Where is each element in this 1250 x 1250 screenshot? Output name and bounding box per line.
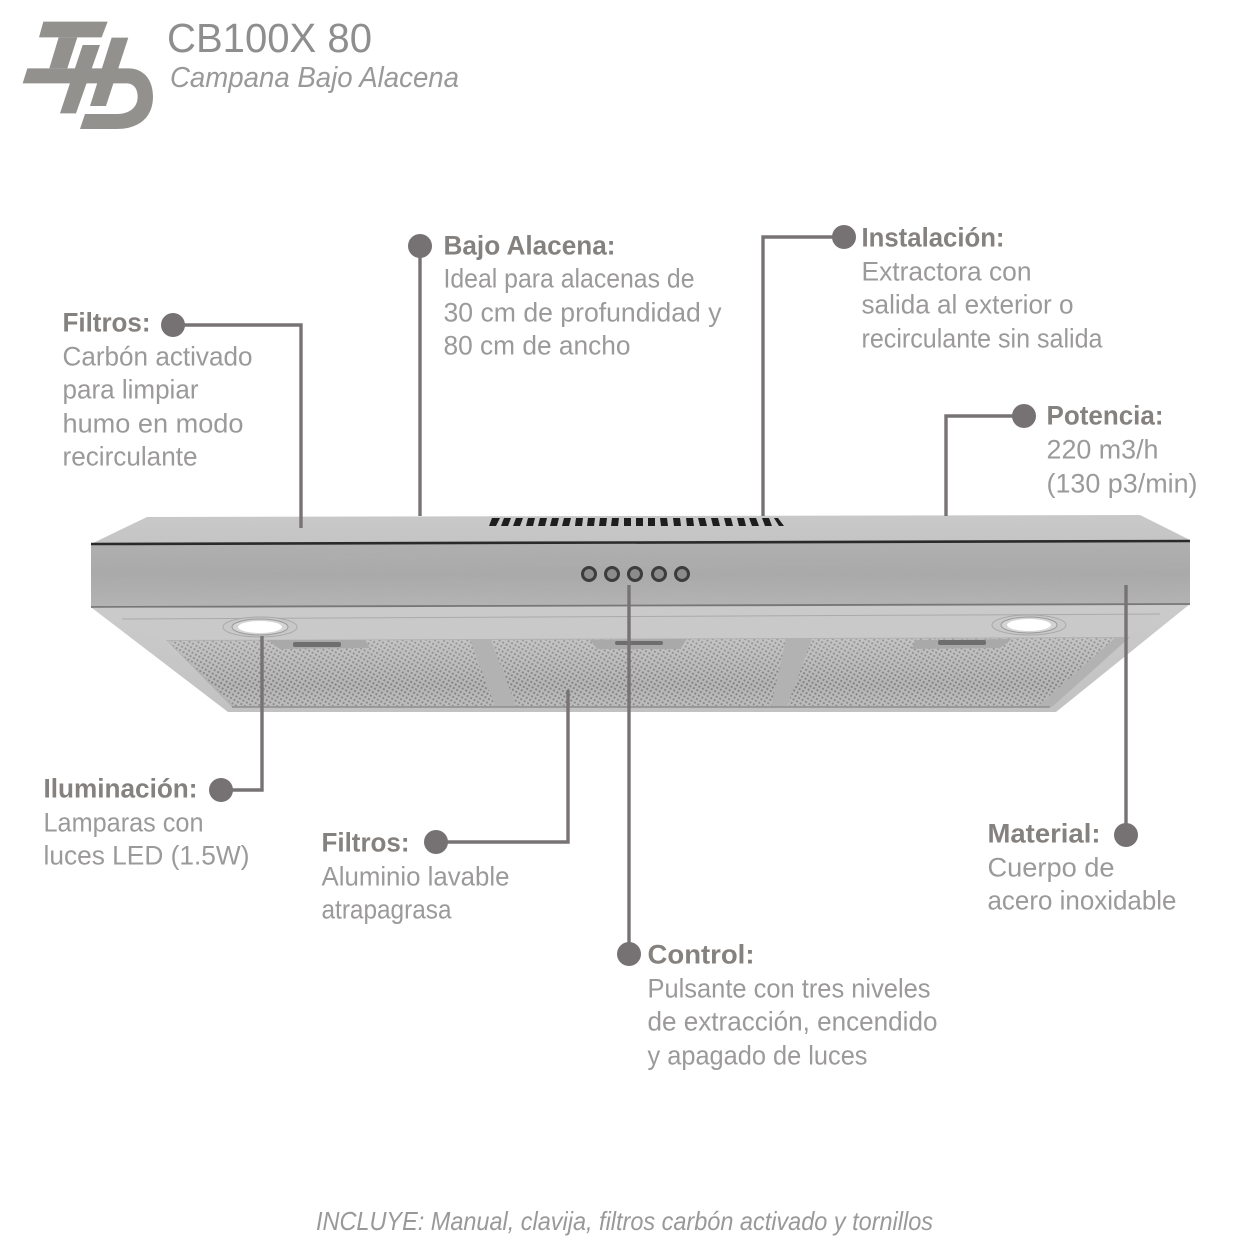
callout text: Carbón activado <box>62 341 252 371</box>
logo: THD monogram <box>23 22 153 129</box>
callout text: 30 cm de profundidad y <box>444 297 722 327</box>
callout text: Pulsante con tres niveles <box>648 973 930 1003</box>
callout text <box>1046 400 1198 498</box>
callout text: Iluminación: <box>44 773 198 803</box>
leader line <box>627 585 631 954</box>
hood front panel <box>91 541 1190 607</box>
callout text: Lamparas con <box>44 807 204 837</box>
callout text: Potencia: <box>1046 400 1164 430</box>
callout text: Control: <box>648 939 754 969</box>
callout text: Material: <box>988 818 1100 848</box>
callout text <box>62 307 252 471</box>
marker dot <box>1012 404 1036 428</box>
title: model name: CB100X 80 <box>167 15 372 61</box>
callout text: Cuerpo de <box>988 852 1114 882</box>
callout text: Ideal para alacenas de <box>444 263 694 293</box>
callout text: humo en modo <box>62 408 244 438</box>
product image: range hood <box>91 515 1190 712</box>
hood top panel <box>91 515 1190 544</box>
callout text: 220 m3/h <box>1046 434 1158 464</box>
callout text <box>322 827 510 924</box>
subtitle: Campana Bajo Alacena <box>170 62 459 94</box>
callout: Bajo Alacena <box>408 230 722 516</box>
leader line <box>1124 585 1128 835</box>
callout text: (130 p3/min) <box>1046 468 1198 498</box>
left lamp <box>223 617 297 637</box>
callout text: Aluminio lavable <box>322 861 510 891</box>
callout text: Filtros: <box>62 307 150 337</box>
filter handles <box>268 639 1012 649</box>
callout text: acero inoxidable <box>988 885 1176 915</box>
hood grey filter frame <box>166 637 1130 707</box>
callout: Material <box>988 585 1176 915</box>
centre filter mesh <box>491 639 786 706</box>
right filter mesh <box>787 638 1115 706</box>
footer note: INCLUYE: Manual, clavija, filtros carbón activado y tornillos <box>316 1206 933 1236</box>
leader line <box>418 246 422 516</box>
callout text: 80 cm de ancho <box>444 330 630 360</box>
leader line <box>221 636 262 790</box>
callout text: luces LED (1.5W) <box>44 840 250 870</box>
callout: Potencia <box>946 400 1198 516</box>
callout text: Instalación: <box>862 222 1004 252</box>
callout: Instalacion <box>763 222 1103 516</box>
callout text: salida al exterior o <box>862 289 1074 319</box>
callout text: recirculante <box>62 441 198 471</box>
callout text <box>648 939 938 1070</box>
callout: Filtros aluminio <box>322 690 568 924</box>
marker dot <box>832 225 856 249</box>
leader line <box>436 690 568 842</box>
marker dot <box>617 942 641 966</box>
callout text: Extractora con <box>862 256 1032 286</box>
callout text: Filtros: <box>322 827 410 857</box>
control buttons <box>582 568 688 580</box>
left filter mesh <box>168 640 495 706</box>
callout text <box>444 230 722 360</box>
callout text: y apagado de luces <box>648 1040 868 1070</box>
marker dot <box>1114 823 1138 847</box>
callout text: atrapagrasa <box>322 894 452 924</box>
callout: Control <box>617 585 938 1070</box>
leader line <box>173 325 301 528</box>
leader line <box>946 416 1024 516</box>
callout: Iluminacion <box>44 636 262 870</box>
marker dot <box>209 778 233 802</box>
callout text: para limpiar <box>62 374 198 404</box>
marker dot <box>408 234 432 258</box>
hood underside <box>92 604 1190 712</box>
callout text: recirculante sin salida <box>862 323 1103 353</box>
marker dot <box>424 830 448 854</box>
callout text: de extracción, encendido <box>648 1006 938 1036</box>
callout text <box>988 818 1176 915</box>
marker dot <box>161 313 185 337</box>
callout text <box>862 222 1103 353</box>
hood vent slots <box>489 518 784 526</box>
callout: Filtros carbon <box>62 307 301 528</box>
callout text <box>44 773 250 870</box>
leader line <box>763 237 844 516</box>
callout text: Bajo Alacena: <box>444 230 616 260</box>
right lamp <box>992 615 1066 635</box>
